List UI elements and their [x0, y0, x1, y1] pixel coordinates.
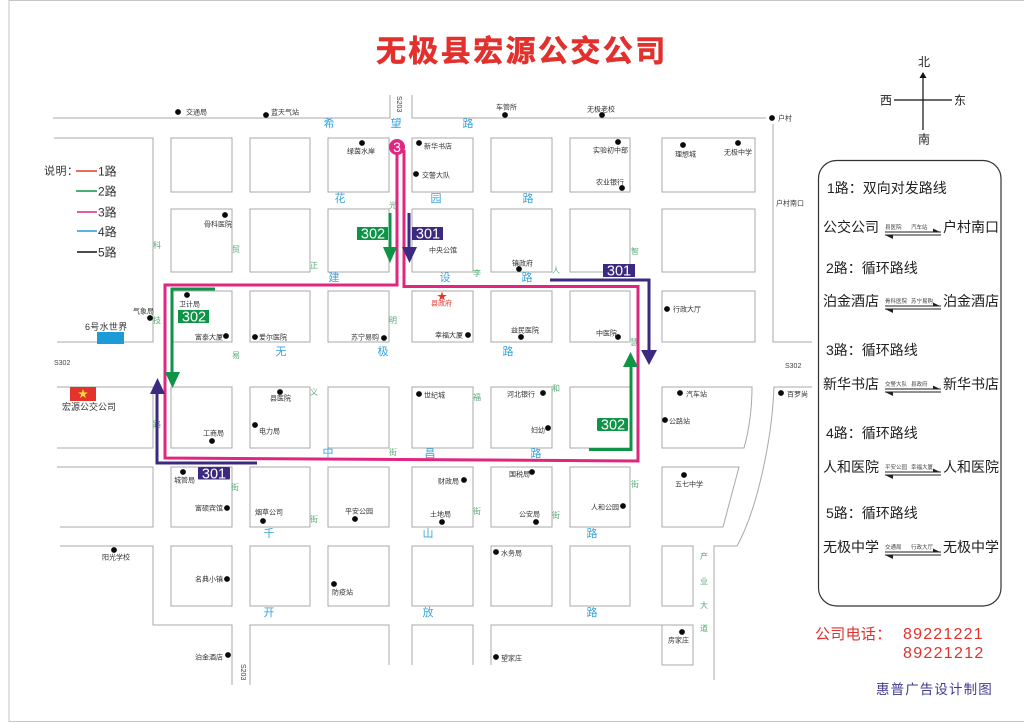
road names: blue: 中	[322, 446, 334, 459]
road names: blue: 昌	[424, 447, 436, 460]
road names: blue: 望	[390, 117, 402, 130]
legend: 1路	[98, 164, 117, 178]
landmarks: points of interest: 汽车站	[686, 390, 707, 398]
icon: compass: 北	[918, 55, 930, 69]
road names: green: 李	[473, 268, 481, 278]
route 3 start marker	[389, 139, 405, 155]
route 3 description: 3路：循环路线	[826, 342, 918, 358]
landmarks: points of interest: 益民医院	[511, 326, 539, 334]
landmarks: points of interest: 河北银行	[507, 390, 535, 398]
landmarks: points of interest: 镇政府	[512, 258, 533, 268]
road names: green: 技	[153, 315, 161, 325]
route 302: green: 302	[361, 226, 385, 242]
route 2 description: 苏宁易购	[911, 297, 933, 305]
landmarks: points of interest: 平安公园	[345, 506, 373, 516]
landmarks: points of interest: 阳光学校	[102, 552, 130, 562]
landmarks: points of interest: 户村南口	[776, 198, 804, 208]
road names: green: 道	[700, 623, 708, 633]
landmark: company flag: 宏源公交公司	[62, 401, 116, 412]
route 3 description	[823, 342, 999, 396]
route 1 description: 户村南口	[943, 219, 999, 235]
legend: 5路	[98, 244, 117, 260]
route 5 description: 无极中学	[943, 539, 999, 555]
designer credit: 惠普广告设计制图	[876, 682, 993, 697]
route 4 description: 平安公园	[885, 463, 908, 471]
road names: blue: 路	[586, 606, 598, 619]
route 2 description: 泊金酒店	[823, 293, 879, 309]
road names: green: 易	[232, 351, 240, 360]
route 2 description: 泊金酒店	[943, 293, 999, 309]
highway labels: S302	[785, 363, 801, 370]
route 302: green	[165, 213, 638, 450]
road names: green: 业	[700, 576, 708, 586]
route 301: purple: 301	[202, 466, 226, 482]
route 3 loop: pink	[165, 150, 638, 461]
landmarks: points of interest: 苏宁易购	[351, 332, 379, 342]
landmarks: points of interest: 县医院	[270, 394, 291, 402]
road names: green: 大	[700, 600, 708, 610]
road names: green: 正	[310, 261, 318, 270]
landmark: 6号水世界: 6号水世界	[85, 321, 128, 332]
legend	[44, 164, 117, 260]
road names: blue: 山	[422, 527, 434, 540]
landmarks: points of interest: 财政局	[438, 476, 459, 486]
road names: blue: 放	[422, 605, 434, 619]
landmarks: points of interest: 农业银行	[596, 178, 624, 186]
title: 无极县宏源公交公司	[376, 36, 668, 68]
highway labels: S302	[54, 360, 70, 367]
road names: green: 义	[310, 388, 318, 397]
route 3 description: 新华书店	[943, 376, 999, 392]
landmarks: points of interest: 交通局	[186, 108, 207, 116]
road names: blue: 路	[530, 447, 542, 460]
icon: compass: 东	[954, 94, 966, 108]
landmarks: points of interest: 富硕宾馆	[195, 504, 223, 512]
road map base: outer roads	[53, 95, 812, 685]
road names: green: 街	[310, 514, 318, 524]
landmark: county government	[431, 292, 452, 308]
road names: blue: 路	[586, 527, 598, 540]
landmarks: points of interest: 望家庄	[501, 654, 522, 662]
road names: blue: 路	[502, 345, 514, 358]
landmark: county government: ★	[437, 292, 447, 303]
road names: green	[153, 200, 708, 633]
route 2 description: 2路：循环路线	[826, 260, 918, 276]
road names: blue: 路	[522, 192, 534, 205]
icon: compass	[880, 55, 966, 146]
road names: blue: 园	[430, 192, 442, 205]
landmarks: points of interest: 绿茵水岸	[347, 146, 375, 156]
landmarks: points of interest: 无极老校	[587, 104, 615, 114]
road names: green: 智	[631, 246, 639, 256]
highway labels	[54, 96, 801, 680]
landmarks: points of interest: 土地局	[430, 510, 451, 518]
legend: 2路	[98, 184, 117, 198]
landmarks: points of interest: 中医院	[596, 328, 617, 338]
landmarks: points of interest: 百罗尚	[787, 390, 808, 398]
road names: green: 街	[389, 447, 397, 457]
route 4 description: 人和医院	[943, 459, 999, 475]
route 1 description: 公交公司	[823, 219, 879, 235]
landmarks: points of interest: 中央公馆	[429, 246, 457, 254]
landmark: company flag: ★	[78, 390, 88, 400]
road names: green: 光	[389, 200, 397, 210]
panel: route list	[818, 160, 1001, 606]
landmarks: points of interest: 行政大厅	[673, 304, 701, 314]
landmarks: points of interest: 富泰大厦	[195, 332, 223, 342]
route 5 description: 5路：循环路线	[826, 505, 918, 521]
landmarks: points of interest: 房家庄	[668, 636, 689, 644]
legend: 3路	[98, 204, 117, 220]
landmarks: points of interest: 烟草公司	[255, 508, 283, 516]
route 1 description	[823, 180, 999, 239]
road names: green: 科	[153, 240, 161, 250]
route 4 description: 幸福大厦	[911, 463, 934, 471]
road names: green: 产	[700, 551, 708, 561]
route 3 start marker: 3	[393, 139, 401, 155]
road names: blue: 无	[276, 346, 286, 358]
route 2 description: 骨科医院	[885, 297, 908, 305]
road names: green: 慧	[630, 337, 638, 347]
landmarks: points of interest: 国税局	[509, 470, 530, 478]
city blocks	[171, 138, 755, 665]
road names: green: 街	[473, 506, 481, 516]
landmarks: points of interest: 车管所	[496, 102, 517, 112]
road names: blue: 设	[440, 271, 450, 284]
road names: blue: 希	[324, 116, 334, 130]
landmarks: points of interest: 新华书店	[424, 142, 452, 150]
road names: blue	[264, 116, 598, 619]
legend: 4路	[98, 224, 117, 239]
road names: green: 路	[153, 419, 161, 429]
route 1 description: 汽车站	[911, 223, 928, 231]
route 4 description: 4路：循环路线	[826, 425, 918, 441]
company phone numbers	[815, 626, 985, 662]
road names: blue: 极	[378, 344, 388, 358]
route 5 description: 无极中学	[823, 539, 879, 555]
route 4 description	[823, 425, 999, 479]
route 301: purple	[150, 213, 657, 482]
road names: blue: 花	[334, 192, 346, 205]
landmarks: points of interest: 城管局	[174, 476, 195, 484]
landmarks: points of interest: 理想城	[675, 150, 696, 158]
landmarks: points of interest: 防疫站	[332, 588, 353, 596]
road names: green: 贸	[232, 244, 240, 254]
route 3 description: 交警大队	[885, 380, 908, 388]
landmarks: points of interest: 无极中学	[724, 148, 752, 156]
landmarks: points of interest: 卫计局	[179, 300, 200, 308]
landmarks: points of interest: 人和公园	[591, 502, 619, 512]
route 302: green: 302	[182, 310, 206, 326]
icon: compass: 南	[918, 132, 930, 146]
landmarks: points of interest: 公路站	[669, 416, 690, 426]
road names: green: 街	[552, 510, 560, 520]
company phone numbers: 89221221	[903, 626, 984, 643]
landmarks: points of interest: 名典小镇	[195, 574, 223, 584]
landmarks: points of interest: 气象局	[133, 306, 154, 316]
route 3 description: 县政府	[911, 380, 928, 388]
company phone numbers: 公司电话：	[815, 626, 892, 643]
road names: blue: 建	[328, 270, 340, 284]
landmarks: points of interest: 世纪城	[424, 390, 445, 400]
road names: green: 福	[473, 393, 481, 402]
route 4 description: 人和医院	[823, 459, 879, 475]
road names: blue: 千	[264, 527, 274, 540]
highway labels: S203	[395, 96, 402, 112]
road names: green: 明	[389, 316, 397, 325]
company phone numbers: 89221212	[903, 645, 985, 662]
landmarks: points of interest: 泊金酒店	[195, 652, 223, 662]
road names: green: 街	[231, 482, 239, 492]
landmark: 6号水世界	[85, 321, 128, 344]
route 301: purple: 301	[607, 264, 631, 280]
route 1 description: 1路：双向对发路线	[827, 180, 947, 196]
landmarks: points of interest: 蓝天气站	[271, 108, 299, 116]
route 5 description: 行政大厅	[911, 543, 934, 551]
route 2 description	[823, 260, 999, 313]
legend: 说明：	[44, 164, 78, 178]
route 1 description: 县医院	[885, 223, 902, 231]
landmark: company flag	[62, 387, 116, 412]
route 301: purple: 301	[416, 226, 440, 242]
landmarks: points of interest: 公安局	[519, 510, 540, 518]
landmarks: points of interest: 工商局	[203, 428, 224, 438]
landmarks: points of interest: 水务局	[501, 548, 522, 558]
landmarks: points of interest	[102, 102, 808, 662]
road names: green: 人	[552, 266, 560, 275]
landmarks: points of interest: 妇幼	[531, 426, 545, 434]
landmarks: points of interest: 爱尔医院	[259, 332, 287, 342]
landmarks: points of interest: 交警大队	[422, 170, 450, 180]
road names: blue: 开	[264, 607, 274, 619]
route 5 description: 交通局	[885, 543, 902, 551]
route 302: green: 302	[601, 418, 625, 434]
route 3 description: 新华书店	[823, 376, 879, 392]
road names: blue: 路	[522, 271, 532, 284]
road names: green: 和	[552, 384, 560, 393]
route 5 description	[823, 505, 999, 559]
landmarks: points of interest: 电力局	[259, 426, 280, 436]
landmarks: points of interest: 骨科医院	[204, 220, 232, 228]
highway labels: S203	[239, 664, 246, 680]
landmarks: points of interest: 实验初中部	[593, 146, 628, 154]
landmarks: points of interest: 五七中学	[675, 480, 703, 488]
road names: green: 街	[631, 479, 639, 489]
road names: blue: 路	[462, 117, 474, 130]
landmarks: points of interest: 幸福大厦	[435, 330, 463, 340]
landmark: county government: 县政府	[431, 298, 452, 308]
icon: compass: 西	[880, 94, 892, 108]
landmarks: points of interest: 户村	[778, 114, 792, 122]
